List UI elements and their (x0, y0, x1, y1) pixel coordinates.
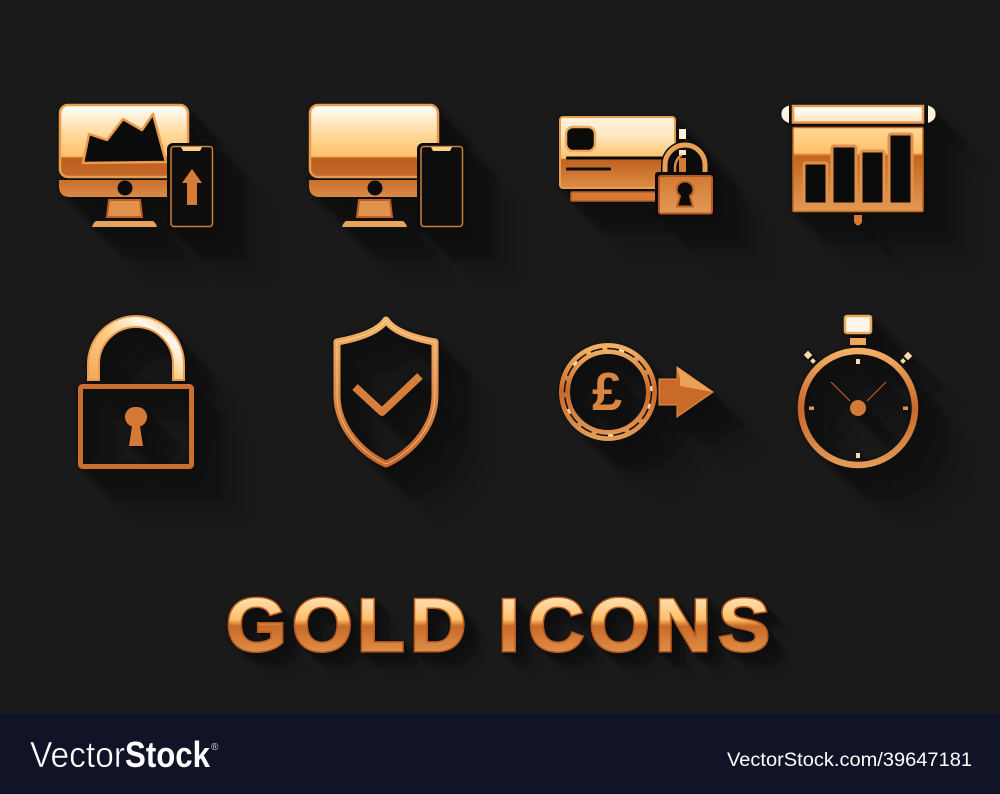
watermark url: VectorStock.com/39647181 (727, 750, 972, 771)
icon: monitor with chart and phone upload (59, 105, 216, 230)
footer bar (0, 714, 1000, 794)
watermark logo: Stock (125, 734, 211, 775)
title: gold icons: GOLD ICONS (226, 584, 770, 668)
watermark logo (30, 734, 219, 775)
icon: open padlock (80, 322, 192, 466)
icon: pound coin with arrow (564, 348, 713, 436)
icon: stopwatch (801, 316, 915, 465)
icon: projection screen with bar chart (781, 106, 936, 226)
icon: monitor and phone (309, 105, 466, 230)
pound sign: £ (592, 362, 622, 422)
icon: credit card with padlock (560, 117, 716, 217)
watermark logo: ® (211, 742, 219, 753)
icon: shield with check mark (337, 320, 435, 464)
watermark logo: Vector (30, 734, 125, 775)
